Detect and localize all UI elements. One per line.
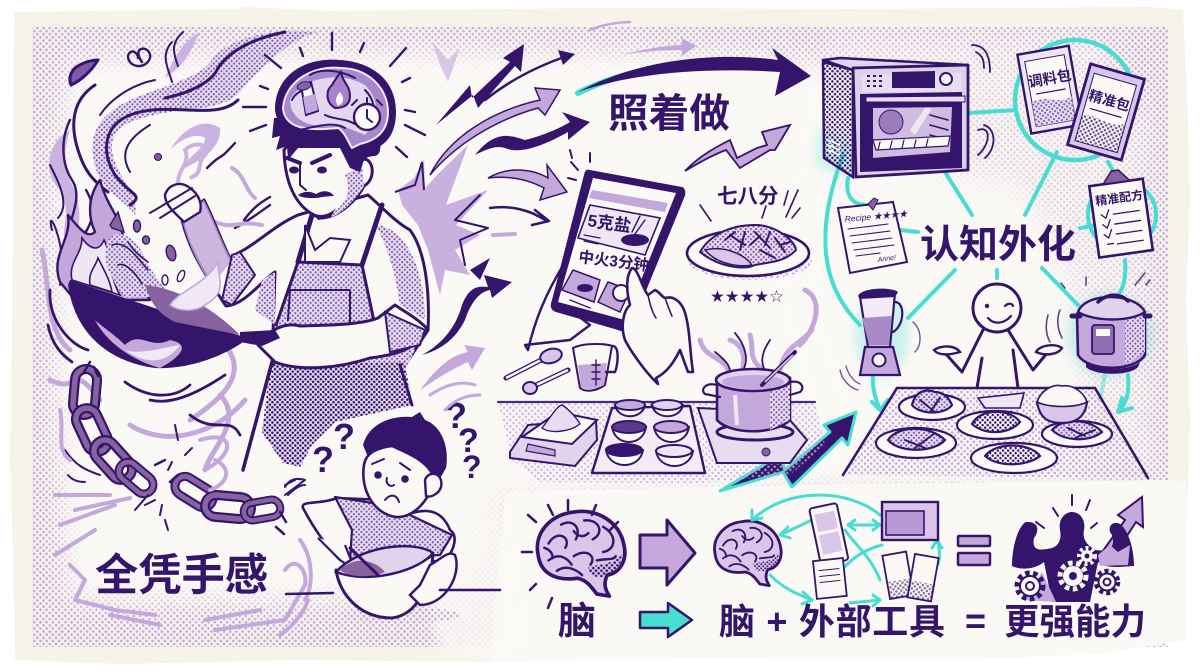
- equation: strong figure with gears: [1012, 495, 1143, 602]
- child with bowl: ?: [445, 395, 467, 436]
- child with bowl: [285, 395, 500, 623]
- heading: 认知外化: 认知外化: [920, 224, 1076, 267]
- arrow: thin curve: [485, 55, 570, 100]
- brain head: [275, 60, 396, 155]
- recipe note: Recipe ★★★★: [844, 208, 909, 224]
- arrow: top lilac: [620, 38, 696, 56]
- apron: [262, 262, 415, 467]
- idea rays: [243, 33, 425, 157]
- text: 精准包: 精准包: [1087, 87, 1132, 114]
- measuring tools: [506, 344, 618, 394]
- title: 全凭手感: 全凭手感: [95, 551, 268, 600]
- arrow: lilac sweep: [430, 88, 560, 175]
- text: 七八分: 七八分: [717, 185, 778, 208]
- equation: brain with tools: [715, 495, 942, 606]
- recipe note: Anne!: [876, 254, 896, 264]
- arrow: zigzag lilac: [685, 125, 790, 171]
- blender: [840, 289, 920, 390]
- equation: arrow: [640, 520, 695, 585]
- face: [284, 130, 372, 218]
- arrow: big teal lower: [720, 412, 856, 491]
- rating stars: ★★★★☆: [710, 287, 784, 306]
- hair: [272, 118, 384, 172]
- prep counter with scale and bowls: [498, 400, 825, 483]
- arrow: lilac right: [488, 165, 567, 200]
- flames and smoke around wok: [42, 31, 318, 470]
- energy burst and arrows: [395, 22, 856, 491]
- steaming pot: [698, 290, 816, 463]
- tablet text: 5克盐: [586, 211, 632, 236]
- child with bowl: ?: [312, 439, 334, 480]
- stick figure: [934, 284, 1062, 388]
- tablet text: 中火3分钟: [578, 248, 650, 275]
- heading: 照着做: 照着做: [608, 92, 730, 136]
- clipboard: [1088, 167, 1153, 258]
- label: equals: =: [965, 600, 986, 641]
- broken chain: [55, 362, 311, 635]
- label: 脑 + 外部工具: 脑 + 外部工具: [719, 601, 945, 642]
- arrow: dark thin: [490, 207, 549, 225]
- child with bowl: ?: [462, 449, 482, 485]
- arrow: dark wave: [422, 275, 512, 355]
- raised hand with chopsticks: [165, 184, 201, 222]
- tablet with hands: [525, 150, 693, 384]
- equation: plain brain: [522, 500, 625, 608]
- man cooking: [68, 33, 428, 470]
- right arm: [258, 305, 428, 368]
- recipe note: [838, 198, 909, 273]
- table with dishes: [843, 386, 1148, 478]
- oven: [823, 45, 994, 177]
- arrow: lightning dark: [436, 44, 524, 125]
- arrow: big top dark with teal: [578, 63, 790, 93]
- label: 更强能力: 更强能力: [1004, 601, 1146, 642]
- label: 脑: 脑: [558, 601, 596, 643]
- text: 调料包: 调料包: [1027, 66, 1073, 91]
- rice cooker: [1046, 273, 1150, 374]
- plate of stir fry: [687, 185, 812, 306]
- shirt and torso: [182, 195, 428, 365]
- wok: [68, 285, 248, 368]
- seasoning packets: [1017, 46, 1144, 160]
- child with bowl: ?: [333, 416, 355, 457]
- arrow: dark thick: [475, 112, 590, 155]
- network connections: [815, 40, 1156, 412]
- eyes brows moustache: [287, 155, 330, 163]
- equation: equals sign: [958, 536, 990, 565]
- label arrow: [640, 603, 692, 637]
- text: 精准配方: 精准配方: [1094, 187, 1144, 208]
- arrow: lilac low: [420, 345, 485, 390]
- child with bowl: ?: [458, 422, 479, 460]
